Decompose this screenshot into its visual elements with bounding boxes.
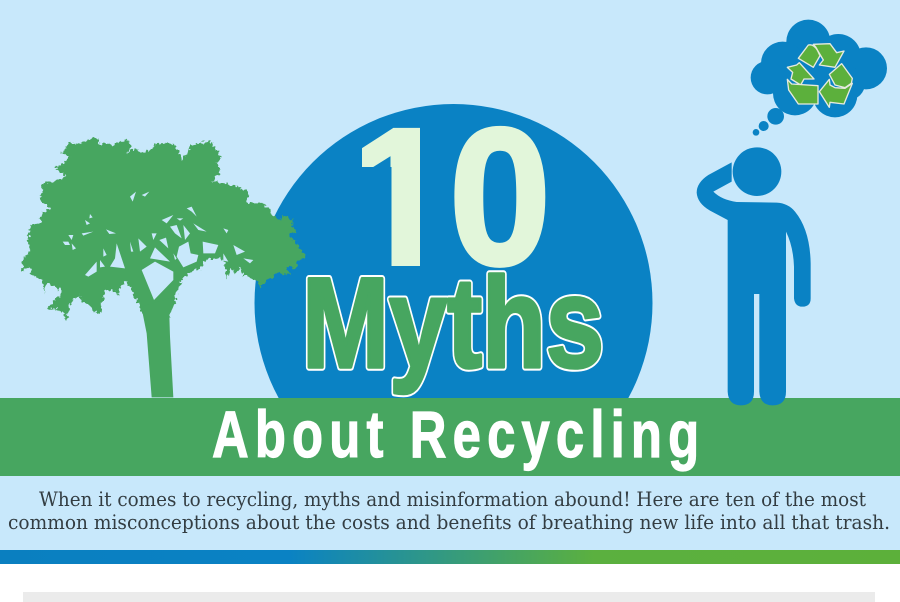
gaps between branches bbox=[63, 192, 253, 300]
tree crown bbox=[22, 137, 307, 322]
icon: thinking person bbox=[697, 20, 887, 405]
tree trunk bbox=[142, 297, 175, 397]
title word: Myths: Myths bbox=[302, 252, 604, 395]
icon: tree bbox=[22, 137, 307, 397]
title word: Myths: Myths bbox=[302, 252, 604, 395]
person body bbox=[697, 162, 811, 405]
icon: recycling symbol bbox=[787, 44, 852, 107]
title number: 10 bbox=[362, 126, 546, 268]
intro text bbox=[8, 487, 890, 534]
title number: 10: 0 bbox=[449, 89, 551, 306]
subtitle: About Recycling: About Recycling bbox=[212, 399, 705, 472]
person head bbox=[733, 147, 781, 196]
green ground band bbox=[0, 398, 900, 476]
large blue circle bbox=[254, 104, 652, 398]
thought bubbles bbox=[753, 108, 784, 136]
thought cloud bbox=[751, 20, 887, 117]
grey content panel bbox=[23, 592, 875, 602]
gradient divider bar bbox=[0, 550, 900, 564]
title number: 10: 1 bbox=[347, 88, 455, 306]
